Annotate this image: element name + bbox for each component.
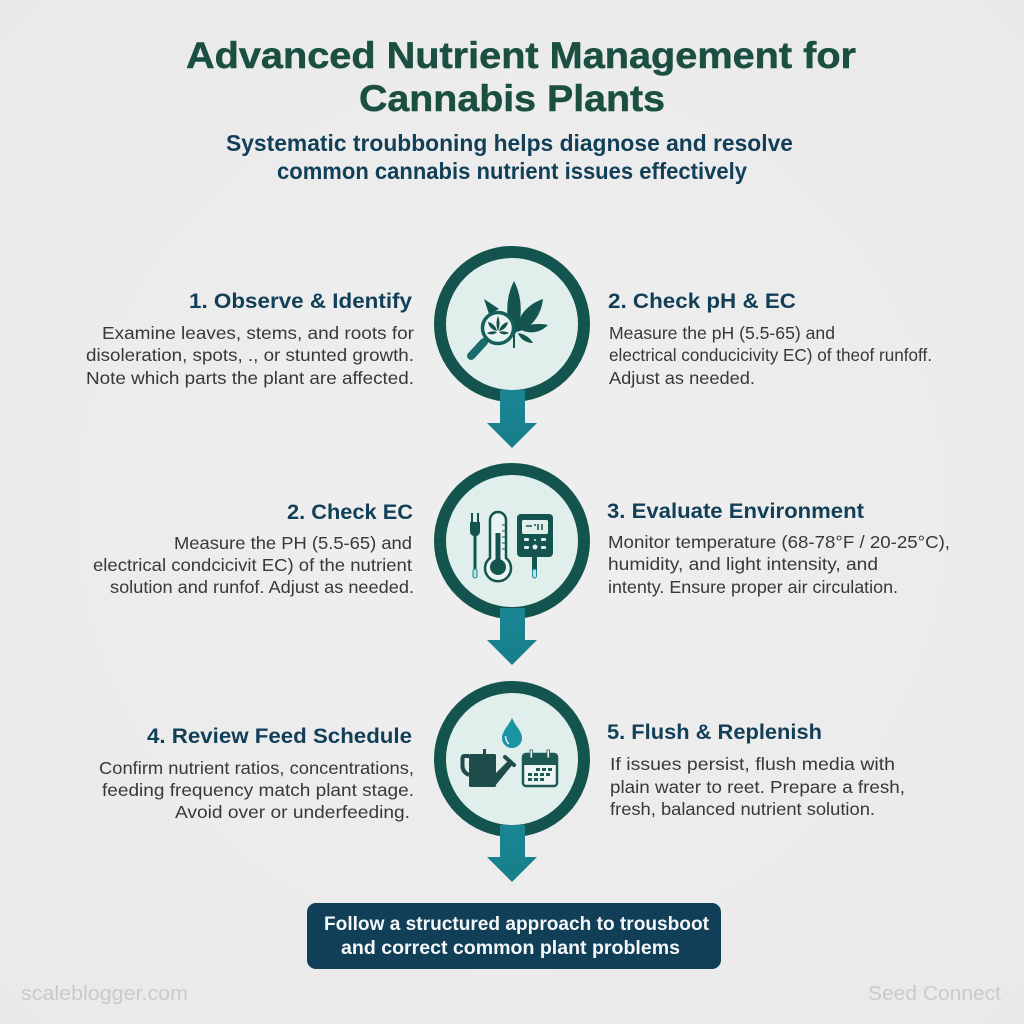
arrow 2 — [487, 608, 537, 665]
icon: water drop, watering can and calendar — [462, 718, 557, 787]
arrow 1 — [487, 390, 537, 448]
step 4: review feed schedule — [99, 724, 414, 822]
step 2: check EC: solution and runfof. Adjust as needed. — [110, 577, 414, 597]
calendar — [523, 750, 557, 786]
step 2: check EC: 2. Check EC — [287, 500, 413, 524]
step 4: review feed schedule: Avoid over or underfeeding. — [175, 802, 410, 822]
step 5: flush and replenish: 5. Flush & Replenish — [607, 720, 822, 744]
step 2: check pH and EC — [608, 289, 932, 388]
circle badge 3 — [440, 687, 584, 831]
title: Advanced Nutrient Management for — [186, 35, 856, 76]
step 5: flush and replenish: fresh, balanced nutrient solution. — [610, 799, 875, 819]
step 5: flush and replenish — [607, 720, 905, 819]
subtitle: common cannabis nutrient issues effectively — [277, 158, 747, 184]
step 1: observe and identify: Note which parts the plant are affected. — [86, 368, 414, 388]
step 4: review feed schedule: 4. Review Feed Schedule — [147, 724, 412, 748]
step 2: check EC: electrical condcicivit EC) of the nutrient — [93, 555, 412, 575]
digital meter — [517, 514, 553, 578]
step 1: observe and identify: Examine leaves, stems, and roots for — [102, 323, 414, 343]
icon: cannabis leaf and magnifier — [471, 281, 548, 356]
step 5: flush and replenish: plain water to reet. Prepare a fresh, — [610, 777, 905, 797]
thermometer — [485, 512, 511, 581]
title — [186, 35, 856, 119]
step 1: observe and identify: 1. Observe & Identify — [189, 289, 412, 313]
footer left brand: scaleblogger.com — [21, 983, 188, 1005]
callout: Follow a structured approach to trousboot — [324, 913, 709, 935]
subtitle: Systematic troubboning helps diagnose and resolve — [226, 130, 793, 156]
step 2: check pH and EC: electrical conducicivity EC) of theof runfoff. — [609, 345, 932, 365]
step 2: check pH and EC: Adjust as needed. — [609, 368, 755, 388]
step 2: check EC: Measure the PH (5.5-65) and — [174, 533, 412, 553]
step 4: review feed schedule: Confirm nutrient ratios, concentrations, — [99, 758, 414, 778]
step 3: evaluate environment: humidity, and light intensity, and — [608, 554, 878, 574]
step 2: check pH and EC: 2. Check pH & EC — [608, 289, 796, 313]
arrow 3 — [487, 825, 537, 882]
step 1: observe and identify — [86, 289, 414, 388]
probe — [470, 513, 480, 578]
step 3: evaluate environment: Monitor temperature (68-78°F / 20-25°C), — [608, 532, 950, 552]
step 3: evaluate environment: 3. Evaluate Environment — [607, 499, 864, 523]
footer right brand: Seed Connect — [868, 983, 1001, 1005]
circle badge 1 — [440, 252, 584, 396]
icon: probe, thermometer and meter — [470, 512, 553, 581]
step 4: review feed schedule: feeding frequency match plant stage. — [102, 780, 414, 800]
step 3: evaluate environment: intenty. Ensure proper air circulation. — [608, 577, 898, 597]
step 1: observe and identify: disoleration, spots, ., or stunted growth. — [86, 345, 414, 365]
step 2: check pH and EC: Measure the pH (5.5-65) and — [609, 323, 835, 343]
title: Cannabis Plants — [359, 78, 665, 119]
circle badge 2 — [440, 469, 584, 613]
callout — [307, 903, 721, 969]
callout: and correct common plant problems — [341, 937, 680, 959]
watering can — [462, 749, 514, 787]
step 3: evaluate environment — [607, 499, 950, 597]
water drop — [502, 718, 522, 748]
step 2: check EC — [93, 500, 414, 597]
step 5: flush and replenish: If issues persist, flush media with — [610, 754, 895, 774]
subtitle — [226, 130, 793, 184]
